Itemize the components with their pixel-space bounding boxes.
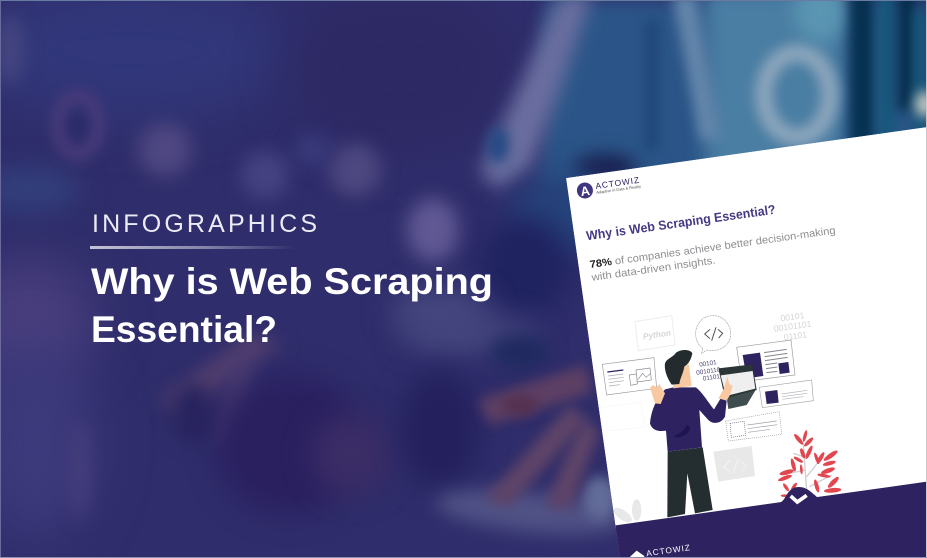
- blurred hand: [160, 335, 285, 420]
- python window: [635, 316, 675, 351]
- top right teal area: [540, 0, 927, 190]
- logo: A: [579, 183, 591, 199]
- gray binary digits: 00101: [780, 310, 805, 323]
- gray plant: [614, 500, 642, 522]
- statistic text: 78% of companies achieve better decision-making: [589, 225, 836, 271]
- dotted ui panel: [726, 412, 782, 441]
- red plant: [777, 430, 842, 497]
- main title: [91, 261, 493, 350]
- legs: [667, 447, 713, 517]
- divider rule: [90, 246, 296, 249]
- torso and arms: [650, 387, 727, 452]
- mound with check mark: [780, 487, 817, 504]
- page header text and logo: [576, 177, 836, 281]
- person: [650, 350, 733, 517]
- image edge highlights: [0, 0, 927, 1]
- gray code card: [713, 446, 755, 482]
- hands: [650, 384, 665, 404]
- eyebrow heading: INFOGRAPHICS: INFOGRAPHICS: [92, 210, 317, 238]
- right ui panel: [737, 340, 795, 382]
- tilted infographic page: [566, 127, 927, 558]
- logo: Adaptive in Data & Reality: [596, 184, 641, 195]
- neck and face: [673, 363, 692, 388]
- python window: Python: [642, 327, 672, 341]
- page heading: Why is Web Scraping Essential?: [585, 202, 776, 243]
- lower right ui panel: [759, 380, 813, 408]
- logo: [576, 177, 641, 198]
- blurred fingers: [478, 365, 592, 425]
- footer logo: ACTOWIZ: [646, 542, 691, 558]
- ring and circular bokeh lights: [58, 96, 98, 154]
- gray binary digits: [774, 312, 812, 340]
- bottom purple band: [616, 482, 927, 558]
- gray binary digits: 01101: [783, 329, 808, 342]
- left ui panel: [602, 358, 657, 395]
- main title: Why is Web Scraping: [91, 261, 493, 302]
- dark binary digits: [696, 360, 720, 380]
- dark binary digits: 0010110: [696, 366, 721, 377]
- footer logo: [630, 544, 690, 557]
- hair: [665, 350, 692, 385]
- keyboard light band: [433, 482, 627, 542]
- code speech bubble: [696, 316, 731, 353]
- faint left dotted panel: [599, 402, 645, 432]
- laptop: [718, 364, 757, 409]
- logo: ACTOWIZ: [595, 175, 640, 191]
- gray binary digits: 00101101: [773, 319, 812, 334]
- statistic text: with data-driven insights.: [590, 255, 716, 284]
- dark binary digits: 01101: [702, 373, 721, 383]
- dark binary digits: 00101: [699, 359, 718, 369]
- main title: Essential?: [91, 309, 277, 350]
